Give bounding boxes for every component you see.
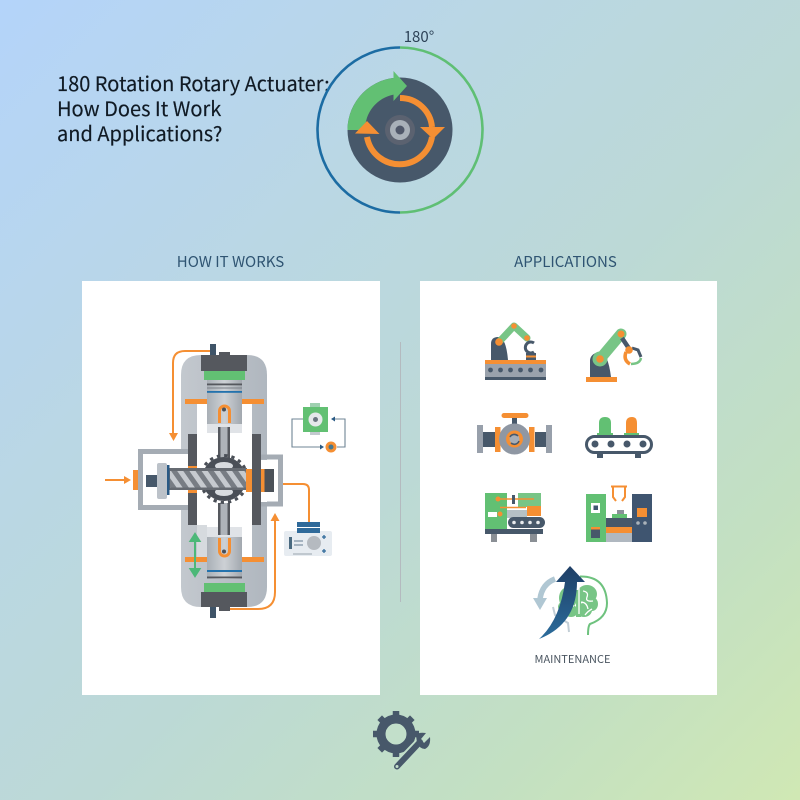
actuator diagram bbox=[133, 344, 280, 618]
title bbox=[57, 68, 330, 147]
heading: applications: APPLICATIONS bbox=[514, 251, 617, 272]
panel: applications bbox=[420, 281, 717, 695]
orange arrow right bbox=[400, 98, 445, 139]
inner window bbox=[197, 404, 252, 557]
top piston bbox=[185, 344, 264, 459]
dark disc bbox=[348, 78, 452, 182]
title: 180 Rotation Rotary Actuater: bbox=[57, 68, 330, 97]
crossbar frame right bbox=[261, 457, 280, 504]
flow arrow bottom bbox=[230, 513, 280, 609]
title: and Applications? bbox=[57, 118, 222, 147]
outer ring: green half bbox=[400, 48, 482, 212]
hub bbox=[385, 115, 415, 145]
control box bbox=[284, 522, 332, 556]
180 degree label: 180° bbox=[404, 26, 434, 47]
connector line to control box bbox=[283, 484, 309, 522]
icon: valve bbox=[477, 413, 552, 454]
recycle arrow bbox=[533, 579, 555, 610]
green travel arrow bbox=[190, 534, 200, 576]
outer ring: blue half bbox=[317, 48, 400, 212]
green arrow bbox=[348, 71, 407, 130]
input arrow bbox=[105, 476, 131, 484]
icon: factory machine with gripper bbox=[586, 486, 652, 542]
icon: robot arm bbox=[586, 330, 641, 382]
left support post bbox=[188, 434, 197, 525]
central gear bbox=[200, 456, 248, 502]
feedback loop diagram bbox=[292, 403, 345, 452]
rotation dial diagram bbox=[317, 26, 482, 212]
icon: assembly machine bbox=[485, 493, 545, 542]
icon: gear and wrench bbox=[373, 711, 430, 768]
bottom piston bbox=[185, 503, 264, 618]
panel: how it works bbox=[82, 281, 380, 695]
housing bbox=[181, 355, 267, 607]
threaded shaft bbox=[133, 434, 274, 525]
panel divider bbox=[400, 342, 401, 602]
growth arrow bbox=[539, 566, 585, 639]
orange arrow bottom bbox=[355, 121, 432, 164]
title: How Does It Work bbox=[57, 93, 221, 122]
icon: conveyor with products bbox=[586, 417, 652, 458]
flow arrow top bbox=[169, 351, 210, 441]
maintenance label: MAINTENANCE bbox=[535, 651, 610, 667]
brain bbox=[558, 585, 598, 617]
heading: how it works: HOW IT WORKS bbox=[177, 251, 284, 272]
head outline bbox=[580, 576, 607, 635]
icon: robot arm on conveyor bbox=[485, 323, 546, 380]
icon: maintenance brain and arrow bbox=[533, 566, 610, 667]
white gaps beside the shaft bbox=[181, 454, 188, 505]
crossbar frame left bbox=[140, 452, 188, 508]
gray head outline bbox=[553, 607, 569, 632]
